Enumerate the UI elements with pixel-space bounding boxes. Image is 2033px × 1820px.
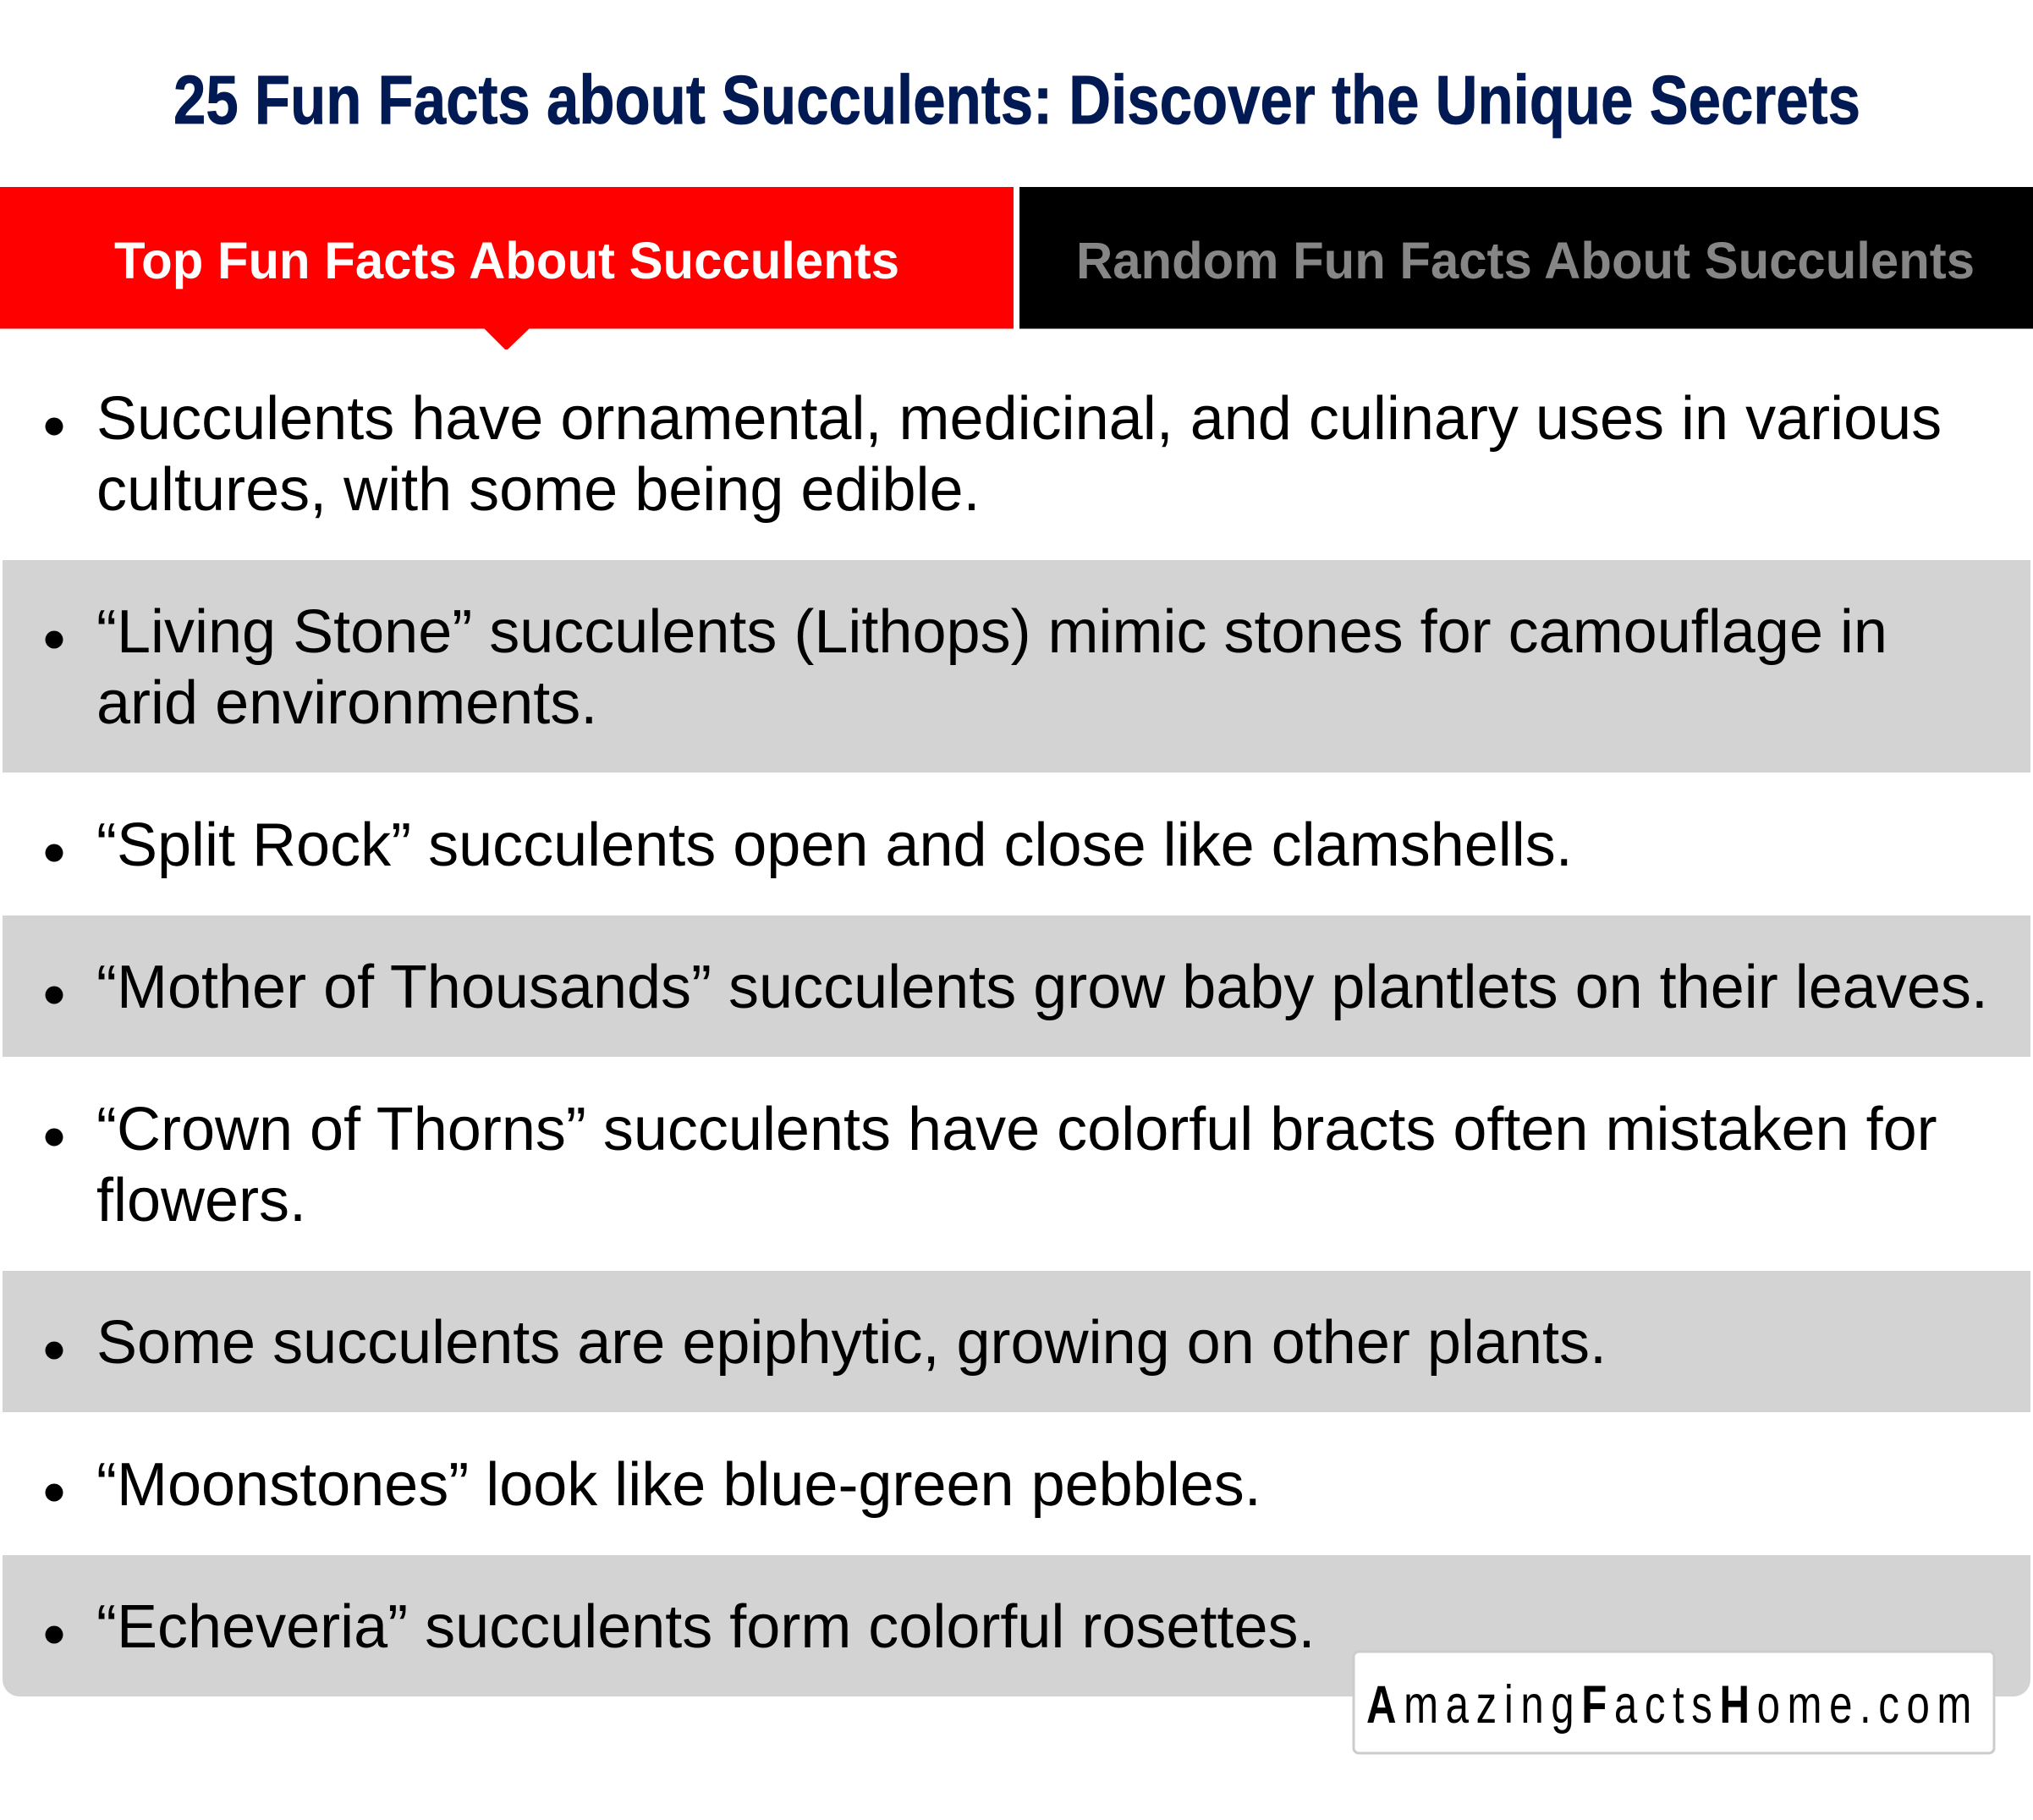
- fact row 5: “Crown of Thorns” succulents have colorful bracts often mistaken for: [96, 1096, 1937, 1163]
- watermark badge: AmazingFactsHome.com: AmazingFactsHome.com: [1366, 1675, 1979, 1735]
- fact row 2: “Living Stone” succulents (Lithops) mimic stones for camouflage in: [96, 598, 1887, 666]
- fact row 7: “Moonstones” look like blue-green pebbles.: [96, 1451, 1261, 1519]
- fact row 5: flowers.: [96, 1167, 306, 1234]
- tab: random fun facts (inactive): Random Fun Facts About Succulents: [1076, 232, 1975, 289]
- fact row 6: [3, 1271, 2030, 1412]
- fact row 6: Some succulents are epiphytic, growing on other plants.: [96, 1309, 1607, 1377]
- fact row 4: [3, 915, 2030, 1057]
- fact row 8: [3, 1555, 2030, 1696]
- fact row 1: cultures, with some being edible.: [96, 456, 981, 524]
- fact row 8: “Echeveria” succulents form colorful rosettes.: [96, 1593, 1316, 1661]
- fact row 2: arid environments.: [96, 669, 597, 737]
- fact row 1: Succulents have ornamental, medicinal, and culinary uses in various: [96, 385, 1942, 453]
- tab: random fun facts (inactive): [1019, 187, 2033, 328]
- fact row 4: “Mother of Thousands” succulents grow baby plantlets on their leaves.: [96, 954, 1988, 1021]
- fact row 3: “Split Rock” succulents open and close like clamshells.: [96, 811, 1573, 879]
- tab: top fun facts (active): [0, 187, 1014, 349]
- fact row 2: [3, 560, 2030, 773]
- fact row 5: [46, 1096, 1937, 1234]
- fact row 1: [46, 385, 1942, 524]
- tab: top fun facts (active): Top Fun Facts About Succulents: [114, 232, 899, 289]
- watermark badge: AmazingFactsHome.com: [1354, 1652, 1994, 1753]
